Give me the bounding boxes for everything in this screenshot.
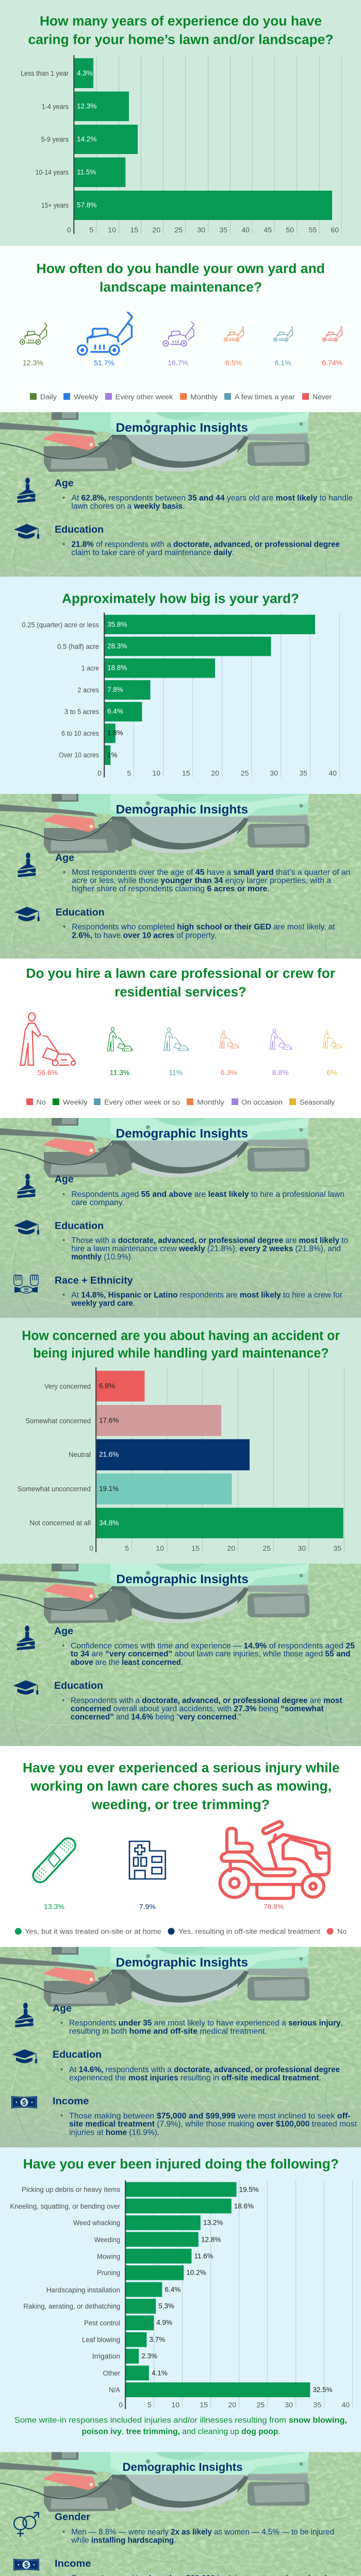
bar chart: years of experience: 14.2%: [77, 135, 96, 143]
bar chart: yard size: 30: [270, 769, 278, 777]
icon row: people mowing with percentages: 8.8%: [272, 1069, 289, 1077]
panel: yard size: [0, 577, 361, 794]
bar chart: yard size: 0.5 (half) acre: [57, 643, 99, 650]
title: caring for your home’s lawn and/or landscape?: [28, 33, 333, 47]
legend: Weekly: [63, 1098, 88, 1106]
icon row: mowers with percentages: 51.7%: [94, 359, 114, 367]
percentages: 13.3%: [44, 1902, 64, 1910]
age insight: [54, 1626, 355, 1667]
bar chart: injury activities: 12.8%: [201, 2236, 221, 2243]
bar chart: years of experience: 57.8%: [77, 201, 96, 209]
bar chart: concern level: 25: [262, 1544, 271, 1552]
percentages: [44, 1902, 284, 1910]
bar chart: injury activities: 11.6%: [194, 2252, 214, 2260]
bar chart: yard size: 0: [97, 769, 102, 777]
title: [22, 1329, 340, 1361]
icon: bandage: [34, 1840, 74, 1880]
bar chart: injury activities: 19.5%: [239, 2185, 259, 2194]
panel: serious injury: [0, 1746, 361, 1947]
bar chart: years of experience: [21, 55, 341, 234]
bar chart: injury activities: 5.3%: [158, 2302, 174, 2310]
bar chart: injury activities: Mowing: [97, 2252, 120, 2261]
bar chart: years of experience: Less than 1 year: [21, 70, 69, 77]
education insight: monthly (10.9%).: [71, 1253, 133, 1262]
age insight: Age: [53, 2003, 72, 2014]
bar chart: years of experience: 30: [197, 226, 205, 234]
bar chart: yard size: 3 to 5 acres: [64, 708, 99, 716]
bar chart: injury activities: Hardscaping installation: [46, 2286, 120, 2294]
bar chart: injury activities: 6.4%: [165, 2285, 180, 2294]
heading: Demographic Insights: [116, 803, 248, 817]
gender insight: Men — 8.8% — were nearly 2x as likely as women — 4.5% — to be injured: [71, 2528, 334, 2536]
bar chart: injury activities: N/A: [109, 2386, 120, 2394]
title: How often do you handle your own yard and: [36, 262, 325, 276]
bar chart: yard size: 10: [152, 769, 160, 777]
age insight: [55, 853, 351, 893]
education insight: hire a lawn maintenance crew weekly (21.8%), every 2 weeks (21.8%), and: [71, 1244, 341, 1253]
bar chart: yard size: 15: [182, 769, 190, 777]
bar chart: yard size: 5: [127, 769, 131, 777]
bar chart: injury activities: Leaf blowing: [82, 2336, 120, 2344]
bar chart: injury activities: 10: [171, 2401, 179, 2409]
title: [36, 262, 325, 295]
bar chart: concern level: [18, 1367, 344, 1552]
icon: cake: [15, 2003, 33, 2027]
bar chart: concern level: 15: [191, 1544, 200, 1552]
title: Have you ever experienced a serious injury while: [23, 1761, 339, 1775]
income insight: injuries at home (16.9%).: [69, 2128, 159, 2137]
education insight: Respondents with a doctorate, advanced, or professional degree are most: [71, 1696, 342, 1705]
panel: demographic insights 4: [0, 1564, 361, 1765]
race and ethnicity insight: Race + Ethnicity: [55, 1275, 133, 1286]
bar chart: years of experience: 25: [174, 226, 183, 234]
panel: injured doing the following: [0, 2147, 361, 2452]
legend: Yes, but it was treated on-site or at home: [25, 1928, 161, 1935]
icon: graduation cap: [14, 524, 39, 539]
income insight: Income: [53, 2096, 89, 2107]
bar chart: injury activities: 30: [285, 2401, 293, 2409]
title: weeding, or tree trimming?: [91, 1798, 270, 1812]
legend: Daily: [40, 393, 57, 401]
legend: Every other week: [116, 393, 173, 401]
bar chart: injury activities: Pest control: [84, 2319, 120, 2327]
title: [28, 14, 333, 47]
bar chart: yard size: 25: [241, 769, 249, 777]
education insight: experienced the most injuries resulting in off-site medical treatment.: [69, 2074, 321, 2082]
icon: cake: [18, 1174, 35, 1198]
percentages: 7.9%: [139, 1902, 156, 1910]
bar chart: injury activities: 3.7%: [149, 2336, 165, 2343]
bar chart: concern level: Somewhat concerned: [25, 1417, 91, 1425]
icon row: mowers with percentages: 6.74%: [322, 359, 342, 367]
bar chart: injury activities: Weed whacking: [73, 2219, 120, 2227]
education insight: 21.8% of respondents with a doctorate, advanced, or professional degree: [71, 540, 340, 549]
panel: how often handle yard: [0, 246, 361, 412]
icon: money: [11, 2096, 37, 2108]
education insight: Respondents who completed high school or their GED are most likely, at: [72, 923, 335, 931]
education insight: Education: [55, 1221, 104, 1231]
icon row: mowers with percentages: [20, 312, 342, 367]
panel: hire a lawn care professional: [0, 959, 361, 1118]
icon row: people mowing with percentages: 6.3%: [221, 1069, 237, 1077]
gender insight: [55, 2512, 334, 2545]
title: Do you hire a lawn care professional or crew for: [26, 967, 335, 981]
income insight: [53, 2096, 357, 2137]
income insight: site medical treatment (7.9%), while those making over $100,000 treated most: [69, 2120, 357, 2129]
bar chart: yard size: 7.8%: [107, 686, 123, 693]
title: Approximately how big is your yard?: [62, 591, 299, 606]
legend: [15, 1928, 347, 1935]
icon: graduation cap: [13, 1680, 38, 1694]
bar chart: concern level: Not concerned at all: [29, 1519, 91, 1527]
icon: raised hands: [14, 1275, 39, 1293]
bar chart: injury activities: Irrigation: [92, 2352, 120, 2360]
age insight: care company.: [71, 1198, 124, 1207]
panel: demographic insights 6: [0, 2452, 361, 2576]
bar chart: concern level: 34.8%: [99, 1519, 119, 1527]
icon: graduation cap: [14, 907, 40, 921]
bar chart: concern level: Neutral: [69, 1451, 91, 1459]
age insight: above are the least concerned.: [71, 1658, 183, 1667]
gender insight: Gender: [55, 2512, 90, 2523]
percentages: 78.8%: [264, 1902, 284, 1910]
bar chart: injury activities: 4.1%: [152, 2369, 168, 2377]
bar chart: yard size: 35.8%: [107, 620, 127, 629]
icon: gender: [14, 2513, 39, 2537]
education insight: [55, 524, 340, 557]
age insight: higher share of respondents claiming 6 acres or more.: [72, 885, 270, 893]
education insight: Education: [55, 524, 104, 535]
age insight: to 34 are “very concerned” about lawn care injuries, while those aged 55 and: [71, 1650, 351, 1658]
icon: hospital: [129, 1841, 166, 1879]
bar chart: yard size: 1 acre: [81, 665, 99, 672]
education insight: 2.6%, to have over 10 acres of property.: [72, 931, 217, 940]
bar chart: years of experience: 12.3%: [77, 102, 96, 110]
bar chart: years of experience: 50: [286, 226, 294, 234]
panel: concern about accidents: [0, 1318, 361, 1564]
title: How many years of experience do you have: [40, 14, 322, 29]
icon row: people mowing with percentages: [20, 1013, 341, 1077]
icon: riding mower: [220, 1824, 329, 1899]
legend: No: [337, 1928, 347, 1935]
bar chart: years of experience: 20: [152, 226, 160, 234]
bar chart: injury activities: Other: [103, 2369, 120, 2377]
legend: Yes, resulting in off-site medical treatment: [178, 1928, 320, 1935]
bar chart: concern level: 35: [333, 1544, 341, 1552]
bar chart: injury activities: 35: [313, 2401, 321, 2409]
income insight: Income: [55, 2558, 91, 2569]
legend: Monthly: [190, 393, 218, 401]
race and ethnicity insight: At 14.8%, Hispanic or Latino respondents are most likely to hire a crew for: [71, 1291, 343, 1300]
icon row: mowers with percentages: 16.7%: [168, 359, 188, 367]
bar chart: concern level: 30: [298, 1544, 306, 1552]
bar chart: injury activities: Kneeling, squatting, or bending over: [10, 2202, 120, 2210]
bar chart: injury activities: 20: [228, 2401, 236, 2409]
income insight: Those making between $75,000 and $99,999 were most inclined to seek off-: [69, 2112, 351, 2121]
age insight: Age: [54, 1626, 73, 1637]
legend: A few times a year: [235, 393, 296, 401]
bar chart: years of experience: 45: [264, 226, 272, 234]
bar chart: concern level: Very concerned: [44, 1383, 91, 1390]
note: write-in responses: poison ivy, tree trimming, and cleaning up dog poop.: [81, 2428, 281, 2436]
bar chart: yard size: Over 10 acres: [59, 751, 99, 759]
bar chart: injury activities: [10, 2180, 353, 2409]
gender insight: while installing hardscaping.: [71, 2536, 176, 2545]
bar chart: injury activities: 32.5%: [313, 2386, 333, 2394]
legend: Weekly: [74, 393, 99, 401]
bar chart: years of experience: 11.5%: [77, 168, 96, 176]
icon: cake: [18, 478, 35, 503]
bar chart: concern level: Somewhat unconcerned: [18, 1485, 91, 1493]
bar chart: concern level: 17.6%: [99, 1417, 119, 1424]
bar chart: yard size: 0.25 (quarter) acre or less: [22, 621, 99, 629]
age insight: Age: [55, 1174, 74, 1185]
bar chart: concern level: 10: [156, 1544, 164, 1552]
panel: demographic insights 2: [0, 794, 361, 995]
bar chart: years of experience: 35: [219, 226, 227, 234]
age insight: resulting in both home and off-site medical treatment.: [69, 2027, 267, 2036]
bar chart: years of experience: 15+ years: [41, 201, 69, 209]
panel: demographic insights 5: [0, 1947, 361, 2148]
heading: Demographic Insights: [116, 1572, 249, 1586]
title: Have you ever been injured doing the following?: [23, 2157, 339, 2172]
bar chart: concern level: 5: [125, 1544, 129, 1552]
icon row: people mowing with percentages: 6%: [327, 1069, 337, 1077]
age insight: Most respondents over the age of 45 have a small yard that’s a quarter of an: [72, 868, 351, 877]
icon: graduation cap: [14, 1220, 39, 1234]
bar chart: years of experience: 60: [331, 226, 339, 234]
education insight: concerned overall about yard accidents, with 27.3% being “somewhat: [71, 1704, 324, 1713]
panel: demographic insights 3: [0, 1118, 361, 1319]
bar chart: concern level: 6.8%: [99, 1382, 115, 1390]
icon row: mowers with percentages: 12.3%: [23, 359, 43, 367]
education insight: claim to take care of yard maintenance daily.: [71, 549, 234, 557]
education insight: [56, 907, 335, 940]
legend: Every other week or so: [104, 1098, 180, 1106]
legend: On occasion: [241, 1098, 283, 1106]
panel: demographic insights 1: [0, 412, 361, 613]
bar chart: injury activities: 0: [119, 2401, 123, 2409]
age insight: Age: [55, 853, 74, 863]
bar chart: years of experience: 10: [108, 226, 116, 234]
bar chart: concern level: 19.1%: [99, 1485, 119, 1493]
age insight: Age: [55, 478, 74, 489]
legend: Never: [313, 393, 332, 401]
bar chart: yard size: 1%: [107, 751, 118, 759]
age insight: [55, 478, 353, 511]
bar chart: years of experience: 1-4 years: [42, 103, 69, 110]
title: [23, 1761, 339, 1812]
bar chart: years of experience: 55: [308, 226, 317, 234]
title: working on lawn care chores such as mowing,: [30, 1780, 332, 1794]
title: [26, 967, 335, 999]
legend: Monthly: [197, 1098, 224, 1106]
bar chart: yard size: 1.8%: [107, 729, 123, 737]
education insight: Those with a doctorate, advanced, or professional degree are most likely to: [71, 1236, 348, 1245]
icon row: people mowing with percentages: 11%: [169, 1069, 183, 1077]
age insight: Respondents aged 55 and above are least likely to hire a professional lawn: [71, 1190, 344, 1199]
title: residential services?: [114, 985, 247, 999]
bar chart: concern level: 20: [227, 1544, 235, 1552]
heading: Demographic Insights: [123, 2461, 242, 2473]
legend: [30, 393, 332, 401]
icon: cake: [18, 853, 36, 877]
race and ethnicity insight: [55, 1275, 343, 1308]
icon: cake: [17, 1625, 35, 1650]
age insight: Confidence comes with time and experience — 14.9% of respondents aged 25: [71, 1641, 355, 1650]
bar chart: injury activities: 25: [256, 2401, 265, 2409]
bar chart: years of experience: 5-9 years: [41, 135, 69, 143]
bar chart: yard size: 35: [299, 769, 307, 777]
age insight: [55, 1174, 344, 1207]
bar chart: yard size: 2 acres: [77, 686, 99, 694]
bar chart: injury activities: Weeding: [94, 2236, 120, 2244]
age insight: At 62.8%, respondents between 35 and 44 years old are most likely to handle: [71, 494, 353, 502]
bar chart: yard size: 40: [329, 769, 337, 777]
bar chart: years of experience: 5: [89, 226, 93, 234]
bar chart: injury activities: 40: [341, 2401, 350, 2409]
education insight: Education: [56, 907, 105, 918]
age insight: acre or less, while those younger than 34 enjoy larger properties, with a: [72, 876, 331, 885]
icon row: mowers with percentages: 6.5%: [225, 359, 242, 367]
bar chart: years of experience: 4.3%: [77, 69, 93, 77]
icon row: mowers with percentages: 6.1%: [275, 359, 291, 367]
race and ethnicity insight: weekly yard care.: [71, 1299, 135, 1308]
education insight: [55, 1221, 348, 1262]
title: being injured while handling yard maintenance?: [33, 1346, 329, 1361]
education insight: At 14.6%, respondents with a doctorate, advanced, or professional degree: [69, 2065, 340, 2074]
bar chart: yard size: 6 to 10 acres: [61, 730, 99, 737]
heading: Demographic Insights: [116, 1127, 248, 1141]
bar chart: injury activities: 5: [147, 2401, 152, 2409]
legend: [26, 1098, 335, 1106]
bar chart: injury activities: Picking up debris or heavy items: [22, 2185, 120, 2194]
note: write-in responses: [14, 2416, 347, 2436]
bar chart: yard size: 28.3%: [107, 642, 127, 650]
bar chart: yard size: 20: [211, 769, 219, 777]
education insight: Education: [53, 2049, 102, 2060]
education insight: [53, 2049, 340, 2082]
bar chart: years of experience: 10-14 years: [36, 168, 69, 176]
icon: graduation cap: [12, 2049, 37, 2063]
title: How concerned are you about having an accident or: [22, 1329, 340, 1343]
icon: money: [13, 2559, 39, 2571]
bar chart: years of experience: 0: [67, 226, 71, 234]
bar chart: injury activities: Raking, aerating, or dethatching: [24, 2302, 120, 2310]
bar chart: injury activities: 18.6%: [234, 2202, 254, 2210]
bar chart: yard size: [22, 613, 339, 777]
bar chart: injury activities: 2.3%: [141, 2352, 157, 2360]
bar chart: injury activities: 4.9%: [156, 2318, 172, 2327]
bar chart: injury activities: 10.2%: [186, 2269, 206, 2276]
bar chart: injury activities: Pruning: [97, 2269, 120, 2277]
education insight: concerned” and 14.6% being “very concerned.”: [71, 1713, 241, 1722]
age insight: lawn chores on a weekly basis.: [71, 502, 185, 511]
bar chart: concern level: 21.6%: [99, 1451, 119, 1458]
bar chart: yard size: 18.8%: [107, 664, 127, 672]
heading: Demographic Insights: [116, 1956, 248, 1970]
bar chart: yard size: 6.4%: [107, 707, 123, 715]
note: write-in responses: Some write-in responses included injuries and/or illnesses resulting from snow blowing,: [14, 2416, 347, 2425]
education insight: [54, 1681, 342, 1722]
icon row: people mowing with percentages: 56.6%: [38, 1069, 58, 1077]
heading: Demographic Insights: [116, 421, 248, 435]
title: landscape maintenance?: [100, 280, 262, 295]
income insight: [55, 2558, 327, 2576]
icon row: people mowing with percentages: 11.3%: [110, 1069, 129, 1077]
panel: years of experience: [0, 0, 361, 246]
legend: No: [36, 1098, 46, 1106]
legend: Seasonally: [300, 1098, 335, 1106]
bar chart: injury activities: 15: [200, 2401, 208, 2409]
age insight: Respondents under 35 are most likely to have experienced a serious injury,: [69, 2019, 343, 2028]
bar chart: concern level: 0: [89, 1544, 93, 1552]
bar chart: years of experience: 15: [130, 226, 138, 234]
age insight: [53, 2003, 343, 2036]
bar chart: years of experience: 40: [241, 226, 250, 234]
education insight: Education: [54, 1681, 103, 1691]
bar chart: injury activities: 13.2%: [203, 2218, 223, 2227]
